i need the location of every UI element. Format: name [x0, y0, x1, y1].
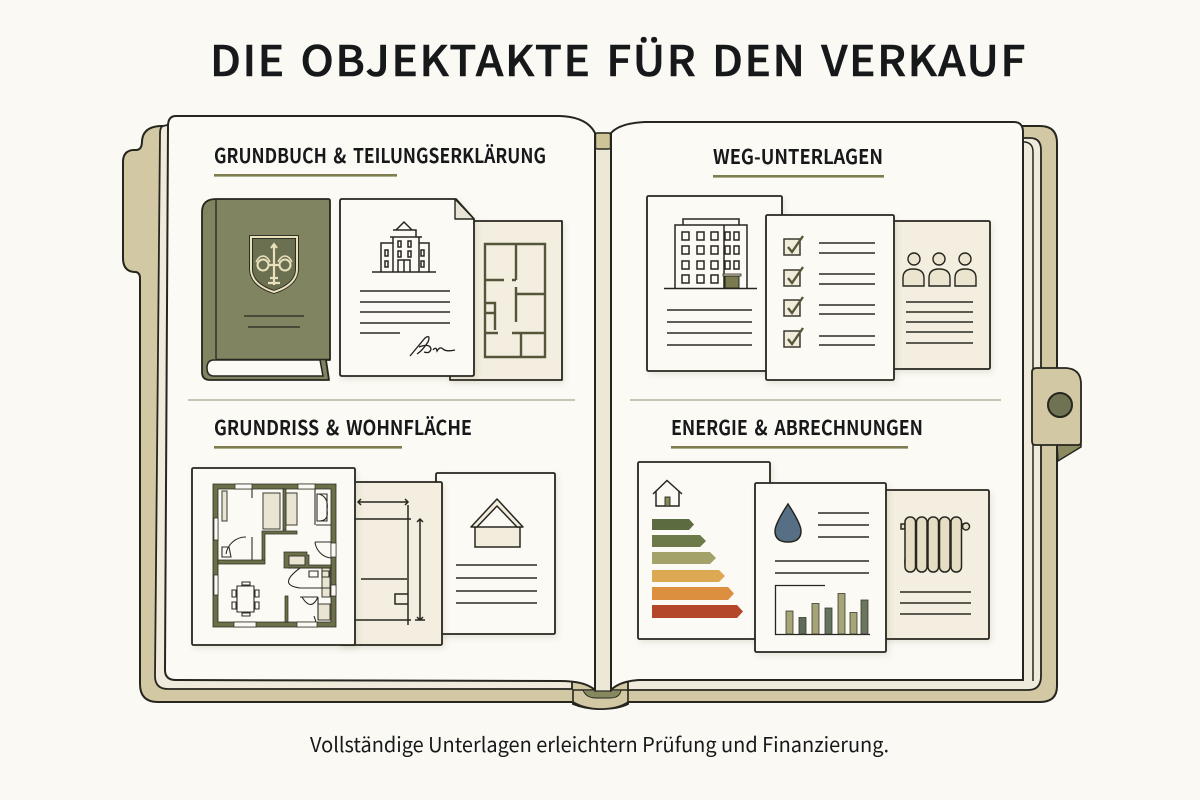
heading underline	[214, 174, 397, 177]
windows	[214, 484, 336, 627]
caption: Vollständige Unterlagen erleichtern Prüfung und Finanzierung.	[310, 728, 889, 758]
icon: coat of arms	[251, 237, 297, 292]
document: dimension drawing	[340, 482, 442, 645]
spine strip	[595, 133, 611, 691]
interior walls	[218, 489, 331, 622]
clasp	[1032, 368, 1081, 461]
section: WEG-Unterlagen	[647, 141, 990, 380]
icon: radiator	[901, 517, 970, 572]
dining table	[232, 582, 259, 616]
title: DIE OBJEKTAKTE FÜR DEN VERKAUF	[210, 28, 1027, 89]
green land register book	[202, 199, 330, 380]
divider right	[630, 399, 1001, 401]
energy rating bars	[652, 519, 743, 618]
right page stack	[628, 138, 1041, 690]
outer walls	[213, 484, 336, 627]
signature	[410, 337, 455, 356]
heading: GRUNDRISS & WOHNFLÄCHE	[214, 412, 472, 441]
section: Grundbuch & Teilungserklärung	[202, 140, 562, 380]
heading: WEG-UNTERLAGEN	[713, 141, 883, 170]
text lines	[775, 513, 869, 573]
icon: house	[653, 480, 682, 506]
document: water and bills chart	[755, 483, 886, 652]
background gap above spine	[570, 120, 630, 133]
open binder	[123, 116, 1081, 709]
document: apartment floor plan	[192, 468, 355, 645]
right page	[611, 122, 1023, 690]
cover bottom centre band	[573, 690, 628, 709]
icon: building	[372, 222, 436, 272]
document: house info	[436, 473, 555, 634]
heading underline	[713, 175, 884, 178]
left page stack	[155, 124, 572, 689]
floor plan document	[450, 221, 562, 380]
text lines	[360, 291, 450, 333]
left page	[165, 116, 595, 690]
heading underline	[671, 446, 908, 449]
heading: GRUNDBUCH & TEILUNGSERKLÄRUNG	[214, 140, 546, 169]
icon: water drop	[775, 504, 801, 542]
document: radiator	[870, 490, 989, 639]
section: Energie & Abrechnungen	[638, 412, 989, 652]
document: checklist	[766, 215, 894, 380]
signed deed document	[340, 199, 474, 376]
document: energy certificate	[638, 462, 770, 639]
document: apartment building	[647, 196, 782, 371]
section: Grundriss & Wohnfläche	[192, 412, 555, 645]
heading underline	[214, 446, 402, 449]
binder cover with tab	[123, 126, 1057, 709]
furniture	[222, 491, 280, 529]
cover lines	[244, 316, 304, 327]
divider left	[188, 399, 575, 401]
heading: ENERGIE & ABRECHNUNGEN	[671, 412, 923, 441]
bar chart	[776, 586, 870, 634]
document: residents	[880, 221, 990, 369]
